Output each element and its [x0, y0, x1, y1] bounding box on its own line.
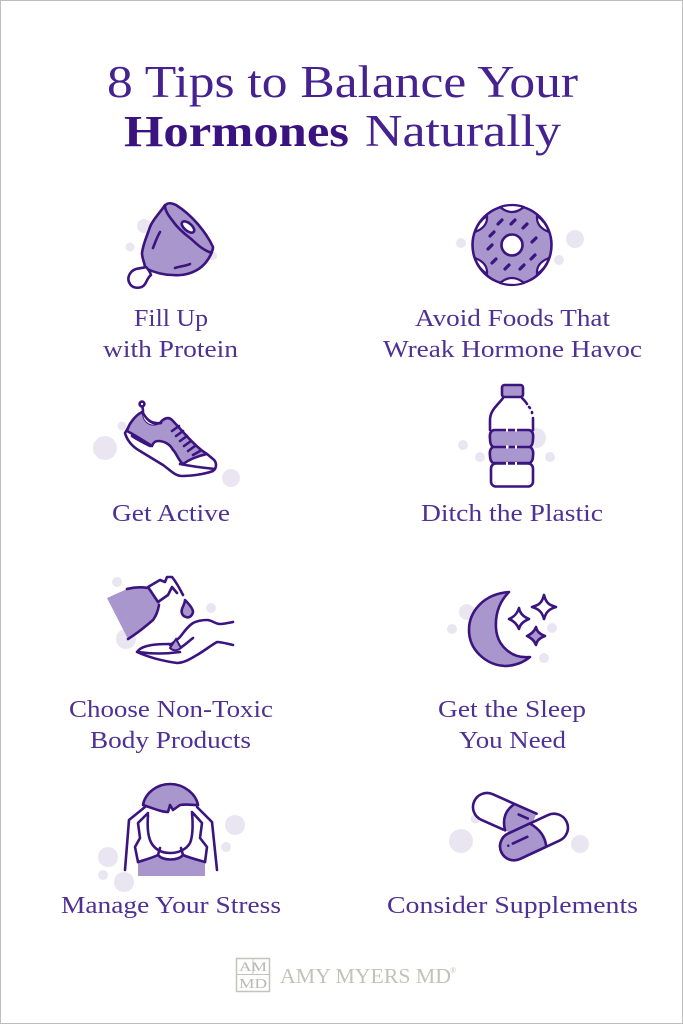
label: Ditch the Plastic: Ditch the Plastic: [421, 501, 603, 527]
label: Get the Sleep You Need: You Need: [459, 728, 566, 754]
label: Get Active: Get Active: [112, 501, 230, 527]
label: Fill Up with Protein: [103, 306, 238, 363]
title: [107, 57, 578, 156]
label: Avoid Foods That Wreak Hormone Havoc: Avoid Foods That: [415, 306, 610, 332]
label: Get the Sleep You Need: Get the Sleep: [438, 697, 586, 723]
title: 8 Tips to Balance Your: [107, 57, 578, 107]
title: Hormones: [124, 107, 349, 156]
label: Avoid Foods That Wreak Hormone Havoc: [383, 306, 642, 363]
label: Manage Your Stress: Manage Your Stress: [61, 893, 281, 919]
icon: stressed person: [98, 784, 245, 892]
label: Fill Up with Protein: with Protein: [103, 337, 238, 363]
icon: ham protein: [126, 203, 217, 288]
logo: Amy Myers MD: AM: [239, 959, 268, 974]
icon: sneaker: [93, 402, 240, 487]
label: Avoid Foods That Wreak Hormone Havoc: Wreak Hormone Havoc: [383, 337, 642, 363]
label: Choose Non-Toxic Body Products: Body Products: [90, 728, 251, 754]
title: Naturally: [365, 106, 562, 156]
logo: Amy Myers MD: AMY MYERS MD: [280, 964, 451, 988]
label: Choose Non-Toxic Body Products: [69, 697, 273, 754]
icon: plastic bottle: [458, 385, 555, 486]
label: Fill Up with Protein: Fill Up: [134, 306, 208, 332]
icon: donut: [456, 205, 584, 285]
label: Choose Non-Toxic Body Products: Choose Non-Toxic: [69, 697, 273, 723]
logo: Amy Myers MD: MD: [239, 977, 267, 992]
label: Consider Supplements: Consider Supplements: [387, 893, 638, 919]
logo: Amy Myers MD: [236, 958, 456, 992]
icon: soap pump and hand: [107, 577, 233, 663]
label: Get the Sleep You Need: [438, 697, 586, 754]
icon: moon and stars: [447, 592, 557, 666]
icon: supplement capsules: [449, 789, 589, 865]
logo: Amy Myers MD: ®: [450, 966, 456, 975]
